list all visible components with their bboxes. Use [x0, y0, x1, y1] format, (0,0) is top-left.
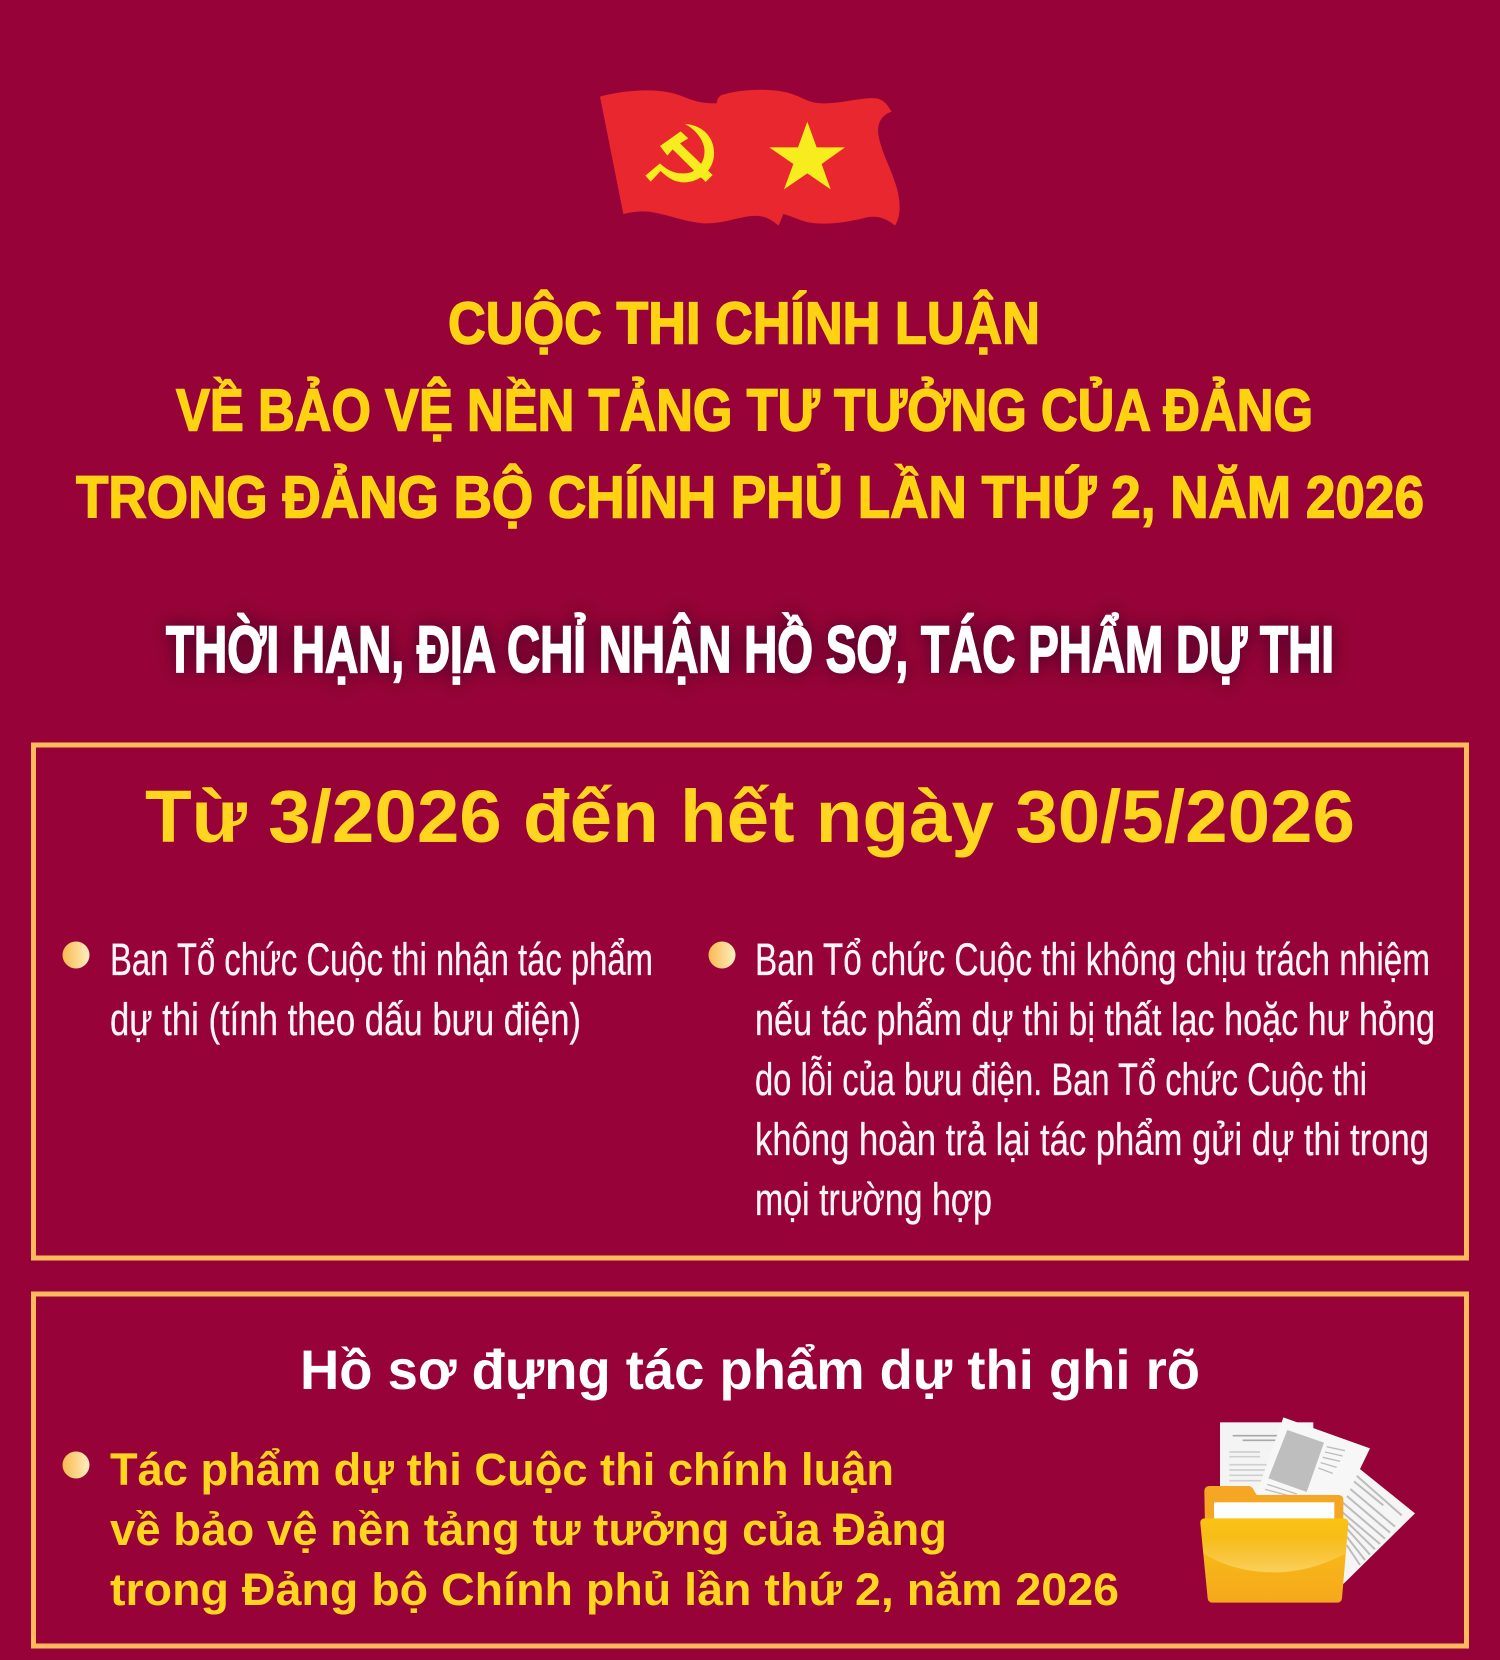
title — [76, 290, 1424, 530]
title: CUỘC THI CHÍNH LUẬN — [448, 290, 1040, 356]
bullet: label text: trong Đảng bộ Chính phủ lần thứ 2, năm 2026 — [110, 1564, 1119, 1615]
bullet: label text: Tác phẩm dự thi Cuộc thi chính luận — [110, 1444, 894, 1495]
dossier heading: Hồ sơ đựng tác phẩm dự thi ghi rõ — [300, 1338, 1200, 1401]
bullet: receiving works — [62, 934, 653, 1045]
bullet: receiving works: Ban Tổ chức Cuộc thi nhận tác phẩm — [110, 934, 653, 985]
panel: deadline — [34, 745, 1466, 1258]
bullet: label text: về bảo vệ nền tảng tư tưởng của Đảng — [110, 1504, 947, 1555]
bullet: liability notice: mọi trường hợp — [755, 1174, 992, 1225]
icon: party and national flag — [600, 90, 900, 226]
bullet: liability notice — [708, 934, 1435, 1225]
bullet: label text — [62, 1444, 1119, 1615]
title: VỀ BẢO VỆ NỀN TẢNG TƯ TƯỞNG CỦA ĐẢNG — [176, 376, 1313, 444]
panel: dossier label — [34, 1294, 1466, 1646]
bullet: receiving works: dự thi (tính theo dấu bưu điện) — [110, 994, 581, 1045]
icon: folder with documents — [1200, 1417, 1415, 1603]
date heading: Từ 3/2026 đến hết ngày 30/5/2026 — [145, 775, 1355, 858]
